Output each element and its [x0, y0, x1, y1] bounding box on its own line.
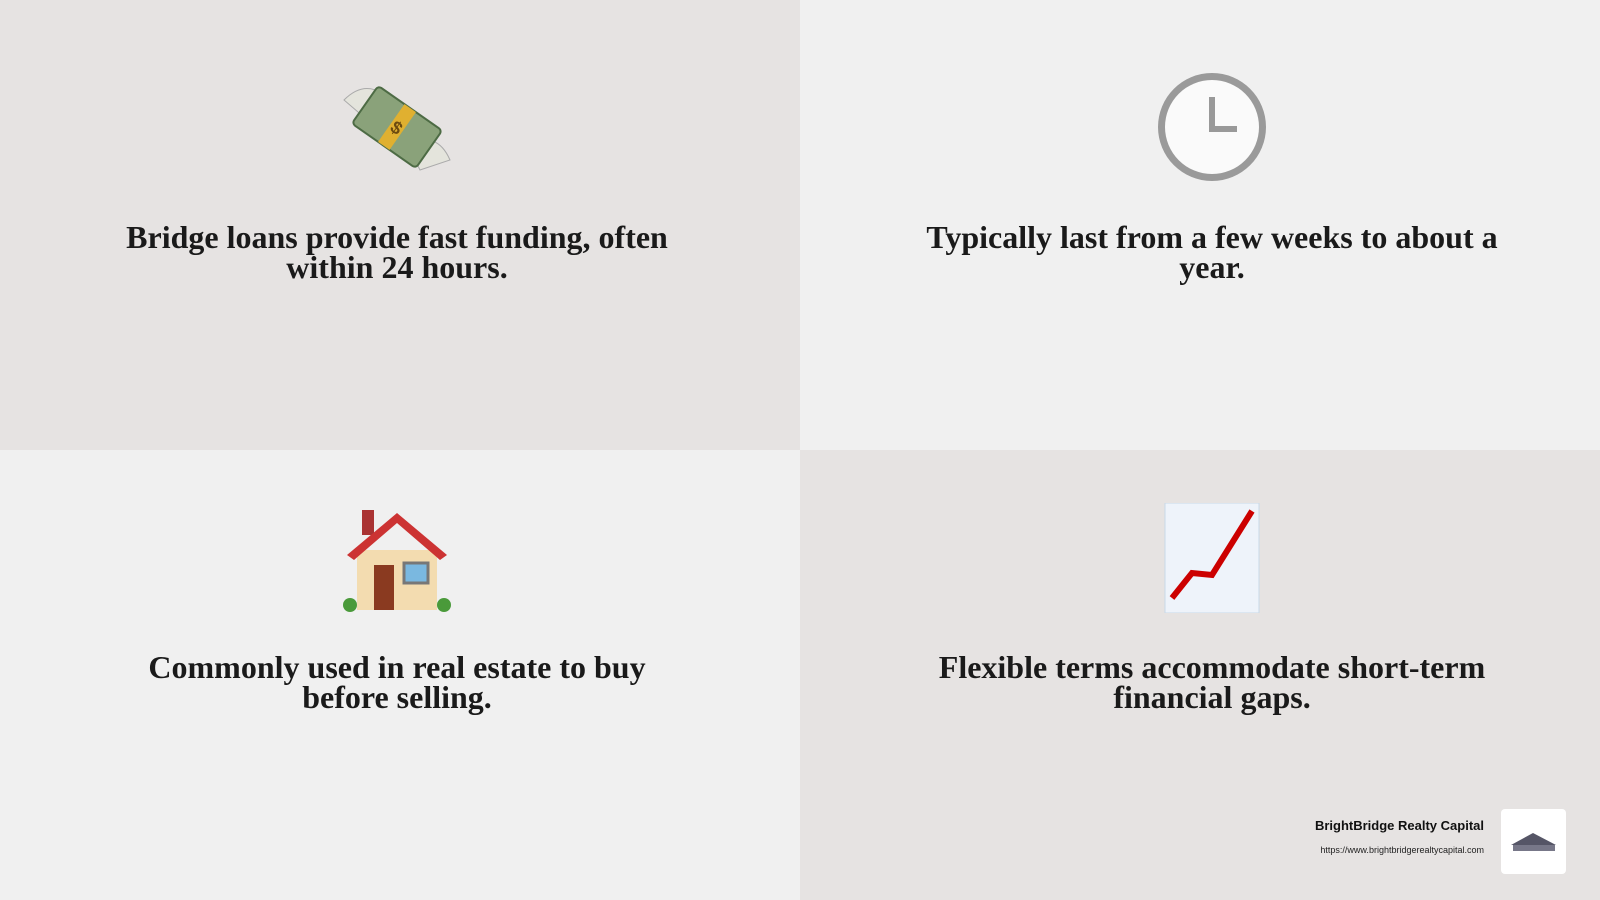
icon: money with wings: $ — [387, 117, 406, 139]
text: duration: Typically last from a few weeks to about a year. — [926, 219, 1498, 285]
panel: flexible terms — [800, 450, 1600, 900]
text: real estate: Commonly used in real estate to buy before selling. — [148, 649, 646, 715]
text: flexible terms: Flexible terms accommodate short-term financial gaps. — [939, 649, 1485, 715]
icon: clock — [1158, 73, 1266, 181]
icon: house — [343, 510, 451, 612]
brand block — [1315, 809, 1566, 874]
panel: duration — [800, 0, 1600, 450]
icon: chart increasing — [1164, 503, 1260, 613]
brand name: BrightBridge Realty Capital — [1315, 818, 1484, 833]
logo — [1501, 809, 1566, 874]
panel: real estate — [0, 450, 800, 900]
text: fast funding: Bridge loans provide fast funding, often within 24 hours. — [126, 219, 668, 285]
icon: money with wings — [344, 86, 450, 170]
panel: fast funding — [0, 0, 800, 450]
brand url: https://www.brightbridgerealtycapital.com — [1320, 845, 1484, 855]
